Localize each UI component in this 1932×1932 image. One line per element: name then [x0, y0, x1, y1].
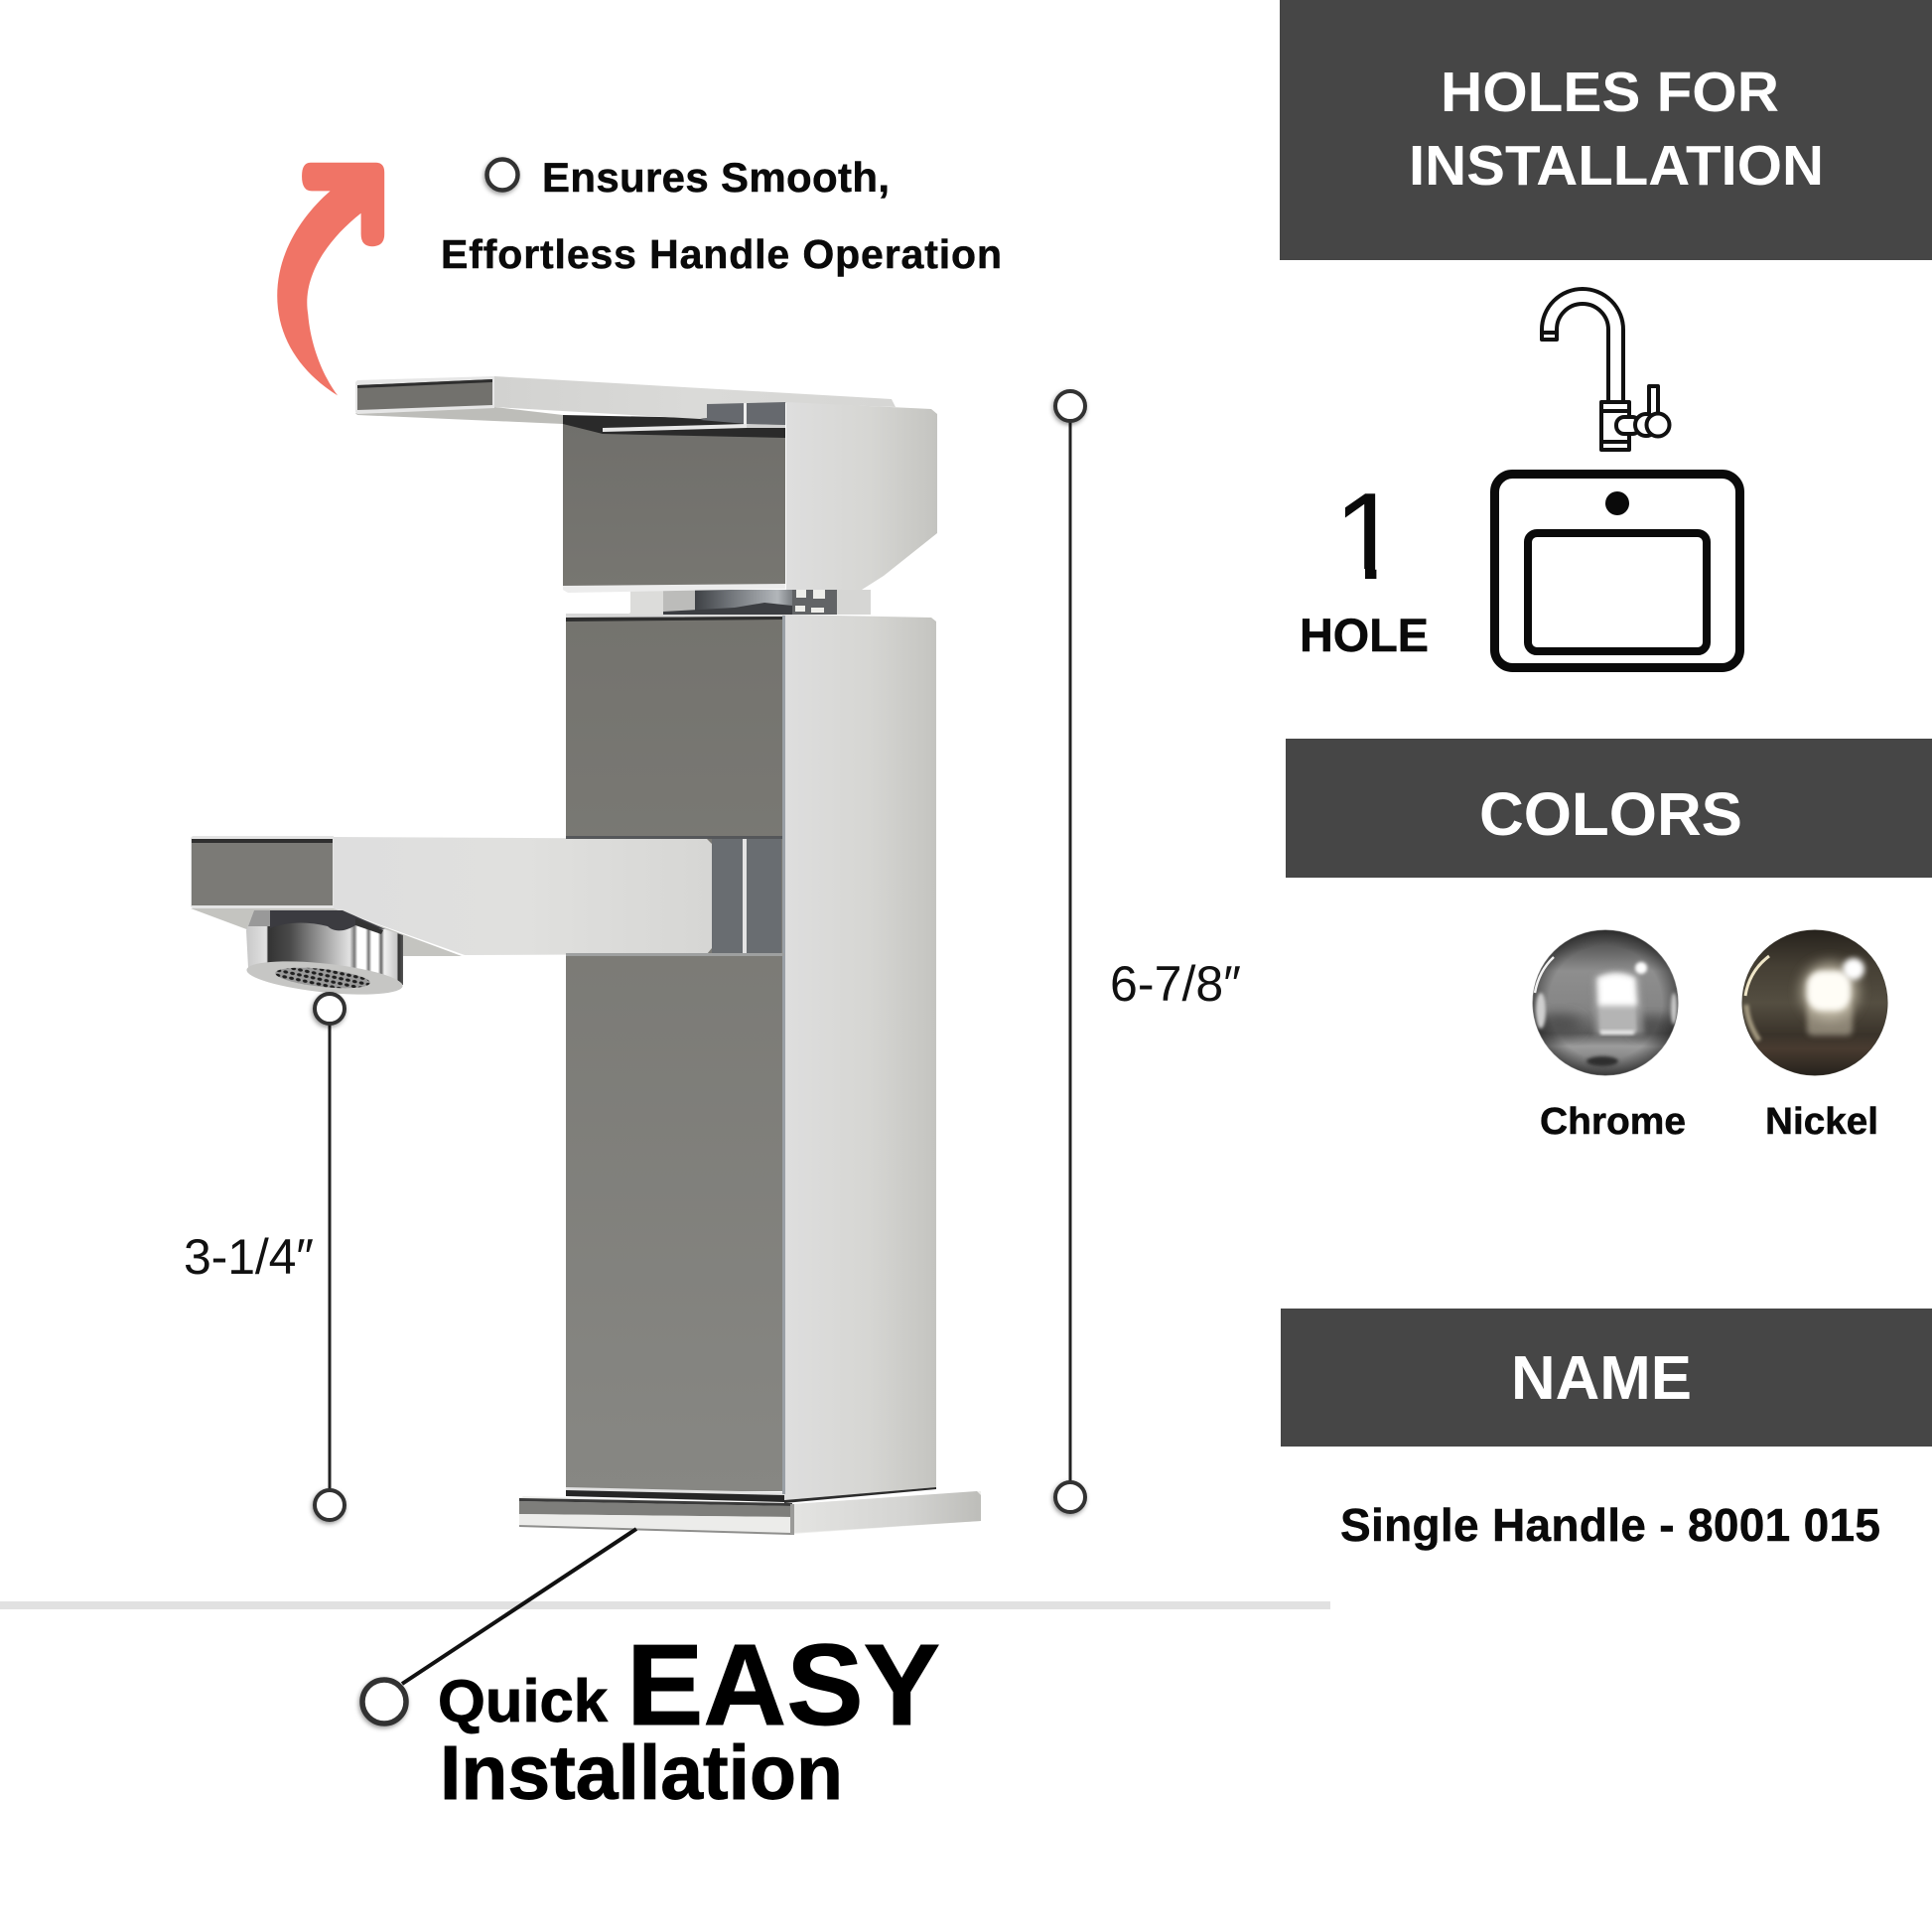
callout: quick easy installation: [362, 1529, 940, 1816]
panel: name header: [1281, 1309, 1932, 1447]
spout lit face: [334, 837, 712, 955]
icon: sink: [1495, 475, 1739, 667]
swatch: nickel label: Nickel: [1765, 1101, 1878, 1143]
dimension: total height: [1055, 391, 1241, 1512]
swatch: chrome: [1529, 929, 1682, 1076]
handle shadow under lever: [563, 415, 785, 438]
swatch: nickel: [1737, 929, 1892, 1076]
product name: Single Handle - 8001 015: [1340, 1499, 1880, 1551]
icon: faucet: [1542, 289, 1670, 450]
handle block lit face: [786, 402, 937, 590]
panel: holes for installation header: INSTALLATION: [1409, 134, 1824, 198]
faucet illustration: [191, 376, 981, 1535]
aerator: [245, 910, 404, 1001]
arrow: handle lift direction: [277, 163, 384, 395]
installation word: Installation: [440, 1730, 843, 1816]
panel: name header: NAME: [1511, 1344, 1692, 1413]
handle recess: [603, 402, 785, 432]
callout: smooth handle: [441, 154, 1002, 277]
lever top lit face: [494, 376, 896, 419]
panel: colors header: COLORS: [1479, 780, 1742, 848]
spout underside: [191, 908, 462, 956]
lever front face: [355, 376, 494, 414]
handle block dark face: [563, 422, 785, 588]
easy word: EASY: [626, 1620, 940, 1749]
callout text line 1: Ensures Smooth,: [542, 154, 890, 201]
handle block lower edge: [563, 584, 785, 593]
callout text line 2: Effortless Handle Operation: [441, 231, 1002, 277]
total height label: 6-7/8″: [1110, 956, 1241, 1012]
spout height label: 3-1/4″: [184, 1229, 314, 1285]
quick word: Quick: [438, 1668, 609, 1734]
lever underside: [355, 407, 563, 424]
neck between handle and body: [627, 590, 871, 615]
callout marker: [486, 159, 518, 191]
swatch: chrome label: Chrome: [1540, 1101, 1686, 1143]
faucet body lit face: [784, 615, 936, 1500]
panel: colors header: [1286, 739, 1932, 878]
body details: [566, 614, 936, 1503]
faucet body dark face: [566, 616, 784, 1491]
hole count label: HOLE: [1300, 609, 1429, 661]
hole count number: 1: [1333, 469, 1402, 606]
faucet base plate: [519, 1491, 981, 1535]
panel: holes for installation header: HOLES FOR: [1441, 61, 1779, 124]
panel: holes for installation header: [1280, 0, 1932, 260]
spout collar: [566, 836, 784, 956]
counter line: [0, 1601, 1330, 1609]
spout front face: [191, 836, 334, 910]
dimension: spout height: [184, 994, 345, 1520]
